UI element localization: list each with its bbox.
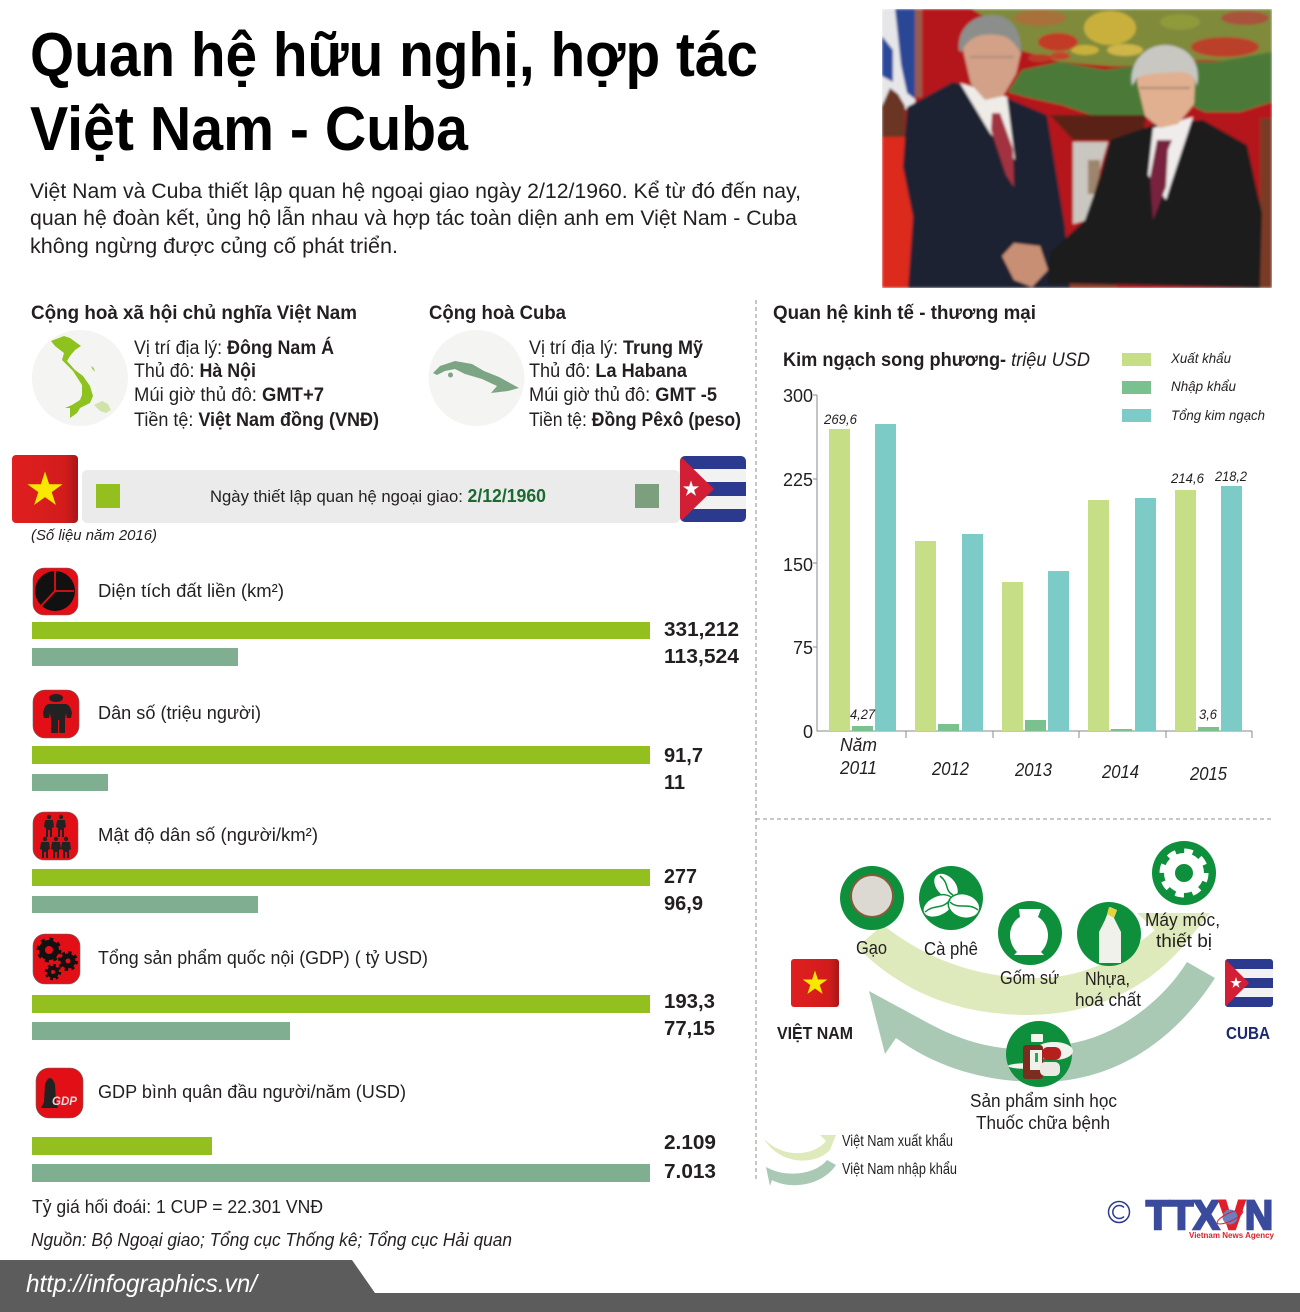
bar: Cuba (32, 648, 238, 666)
legend banner: date of relations (82, 470, 680, 523)
values: 2.109 (664, 1132, 716, 1154)
map circle (32, 330, 128, 426)
value labels: 4,27 (850, 707, 875, 722)
icon: group of people (33, 812, 78, 860)
exchange rate note: Tỷ giá hối đoái: 1 CUP = 22.301 VNĐ (32, 1197, 323, 1217)
facts: Vietnam: Tiền tệ: Việt Nam đồng (VNĐ) (134, 410, 379, 431)
x axis year labels: 2014 (1101, 762, 1139, 782)
flag: Cuba (680, 456, 746, 522)
y axis labels: 150 (783, 555, 813, 575)
panel: Vietnam profile (31, 302, 379, 431)
values: 7.013 (664, 1161, 716, 1183)
icon: GDP per person: GDP (52, 1096, 77, 1108)
metric: land area (32, 568, 740, 668)
label: Dân số (triệu người) (98, 702, 261, 723)
x axis year labels: 2015 (1189, 764, 1228, 784)
flowers (972, 9, 1272, 66)
x axis year labels: 2013 (1014, 760, 1052, 780)
values: 193,3 (664, 991, 715, 1013)
product labels: Thuốc chữa bệnh (976, 1113, 1110, 1133)
product labels: hoá chất (1075, 990, 1141, 1010)
icon: gears (33, 934, 80, 984)
x axis year labels: 2011 (839, 758, 877, 778)
label: Tổng sản phẩm quốc nội (GDP) ( tỷ USD) (98, 947, 428, 968)
metric: GDP (32, 934, 715, 1040)
title: Quan hệ hữu nghị, hợp tác (30, 21, 758, 90)
x axis year labels: Năm (840, 735, 877, 755)
values: 11 (664, 772, 685, 794)
label: Diện tích đất liền (km²) (98, 580, 284, 601)
swatch: Vietnam (96, 484, 120, 508)
legend arrow: import (766, 1160, 836, 1186)
chart title: Kim ngạch song phương- triệu USD (783, 350, 1090, 371)
values (664, 1132, 716, 1183)
icon: medicine (1006, 1021, 1073, 1087)
chart legend: Xuất khẩu (1170, 350, 1231, 366)
heading: Vietnam: Cộng hoà xã hội chủ nghĩa Việt Nam (31, 302, 357, 324)
banner background (82, 470, 680, 523)
icon: plastic bottle (1077, 902, 1141, 966)
bar: Vietnam (32, 746, 650, 764)
y axis labels (783, 386, 813, 742)
value labels: 269,6 (823, 412, 857, 427)
y axis labels: 0 (803, 722, 813, 742)
value labels: 218,2 (1214, 469, 1247, 484)
metric: population (32, 690, 703, 794)
vertical dashed divider (755, 300, 757, 1182)
title (30, 21, 758, 164)
icon: rice (840, 866, 904, 930)
metric: population density (32, 812, 703, 915)
flag: Cuba small (1225, 959, 1273, 1007)
bar: Cuba (32, 1022, 290, 1040)
product labels: Sản phẩm sinh học (970, 1091, 1117, 1111)
map circle (428, 330, 524, 426)
icon: pie chart (33, 568, 78, 615)
facts: Vietnam (134, 337, 379, 431)
label: Cuba: CUBA (1226, 1023, 1270, 1043)
bar: Cuba (32, 774, 108, 791)
left figure (903, 82, 1070, 288)
product labels: Nhựa, (1085, 969, 1130, 989)
copyright mark (1108, 1202, 1130, 1222)
bars: import (852, 720, 1219, 731)
product labels: thiết bị (1156, 931, 1212, 951)
icon: gear machinery (1152, 841, 1216, 905)
chart legend (1122, 350, 1265, 423)
flag: Vietnam small (791, 959, 839, 1007)
diagram legend (764, 1133, 957, 1186)
product labels: Gạo (856, 938, 887, 958)
bar: Vietnam (32, 622, 650, 639)
facts: Cuba: Vị trí địa lý: Trung Mỹ (529, 338, 703, 359)
chart legend: Tổng kim ngạch (1171, 407, 1265, 423)
footer band (0, 1260, 1300, 1312)
chart legend: Nhập khẩu (1171, 378, 1236, 394)
facts: Vietnam: Múi giờ thủ đô: GMT+7 (134, 385, 324, 406)
bar: Cuba (32, 1164, 650, 1182)
label: Mật độ dân số (người/km²) (98, 824, 318, 845)
x axis year labels: 2012 (931, 759, 969, 779)
map: Vietnam (51, 336, 111, 418)
arrow: Vietnam imports (869, 962, 1215, 1082)
values (664, 745, 703, 794)
product labels (856, 910, 1220, 1133)
wordmark: TTXVN (1146, 1192, 1273, 1238)
palm leaves (1008, 52, 1272, 118)
product labels: Cà phê (924, 939, 978, 959)
values (664, 619, 740, 668)
values (664, 866, 703, 915)
tagline: Vietnam News Agency (1189, 1230, 1274, 1240)
values: 96,9 (664, 893, 703, 915)
source note: Nguồn: Bộ Ngoại giao; Tổng cục Thống kê; Tổng cục Hải quan (31, 1229, 512, 1250)
facts: Vietnam: Vị trí địa lý: Đông Nam Á (134, 337, 334, 359)
title: Việt Nam - Cuba (30, 95, 468, 164)
bar: Cuba (32, 896, 258, 913)
label: GDP bình quân đầu người/năm (USD) (98, 1081, 406, 1102)
value labels: 3,6 (1199, 707, 1217, 722)
intro text block: Việt Nam và Cuba thiết lập quan hệ ngoại giao ngày 2/12/1960. Kể từ đó đến nay, (30, 179, 801, 203)
product labels: Gốm sứ (1000, 968, 1059, 988)
swatch: Cuba (635, 484, 659, 508)
intro text block: quan hệ đoàn kết, ủng hộ lẫn nhau và hợp tác toàn diện anh em Việt Nam - Cuba (30, 205, 797, 230)
label: Vietnam: VIỆT NAM (777, 1022, 853, 1043)
axes (813, 395, 1252, 738)
horizontal dashed divider (756, 818, 1272, 820)
footer url: http://infographics.vn/ (26, 1270, 260, 1298)
values: 91,7 (664, 745, 703, 767)
bar chart: bilateral trade (783, 350, 1265, 784)
values: 277 (664, 866, 697, 888)
panel: Cuba profile (428, 302, 741, 431)
y axis labels: 225 (783, 470, 813, 490)
bars: export (829, 429, 1196, 731)
y axis labels: 75 (793, 638, 813, 658)
values: 331,212 (664, 619, 739, 641)
legend arrow: export (764, 1135, 836, 1161)
icon: ceramic vase (998, 901, 1062, 965)
panel: trade flow diagram (764, 841, 1273, 1186)
facts: Cuba: Thủ đô: La Habana (529, 361, 687, 382)
x axis year labels (839, 735, 1228, 784)
hands (1002, 243, 1048, 287)
product labels: Máy móc, (1145, 910, 1220, 930)
globe (1216, 1207, 1244, 1227)
icon: GDP per person (36, 1068, 83, 1118)
value labels: 214,6 (1170, 471, 1204, 486)
facts: Cuba: Múi giờ thủ đô: GMT -5 (529, 385, 717, 406)
right figure (1048, 120, 1262, 288)
bar: Vietnam (32, 995, 650, 1013)
bar: Vietnam (32, 869, 650, 886)
bar: Vietnam (32, 1137, 212, 1155)
flag: Vietnam (12, 455, 78, 523)
icon: coffee beans (919, 866, 983, 930)
value labels (823, 412, 1247, 722)
heading: Cuba: Cộng hoà Cuba (429, 302, 566, 324)
facts: Vietnam: Thủ đô: Hà Nội (134, 361, 256, 382)
data year note: (Số liệu năm 2016) (31, 527, 157, 544)
facts: Cuba (529, 338, 741, 431)
legend text: export: Việt Nam xuất khẩu (842, 1133, 953, 1150)
map: Cuba (433, 361, 519, 393)
icon: person (33, 690, 79, 738)
metric: GDP per capita (32, 1068, 716, 1183)
facts: Cuba: Tiền tệ: Đồng Pêxô (peso) (529, 410, 741, 431)
banner text: Ngày thiết lập quan hệ ngoại giao: 2/12/1960 (210, 486, 546, 506)
logo: TTXVN (1108, 1192, 1274, 1240)
arrow: Vietnam exports (857, 913, 1210, 1015)
heading: economy and trade: Quan hệ kinh tế - thương mại (773, 302, 1036, 324)
photo: two leaders shaking hands (882, 9, 1272, 288)
values (664, 991, 715, 1040)
intro text block (30, 179, 801, 258)
values: 113,524 (664, 646, 740, 668)
values: 77,15 (664, 1018, 715, 1040)
y axis labels: 300 (783, 386, 813, 406)
intro text block: không ngừng được củng cố phát triển. (30, 234, 398, 258)
legend text: import: Việt Nam nhập khẩu (842, 1161, 957, 1178)
bars: total (875, 424, 1242, 731)
